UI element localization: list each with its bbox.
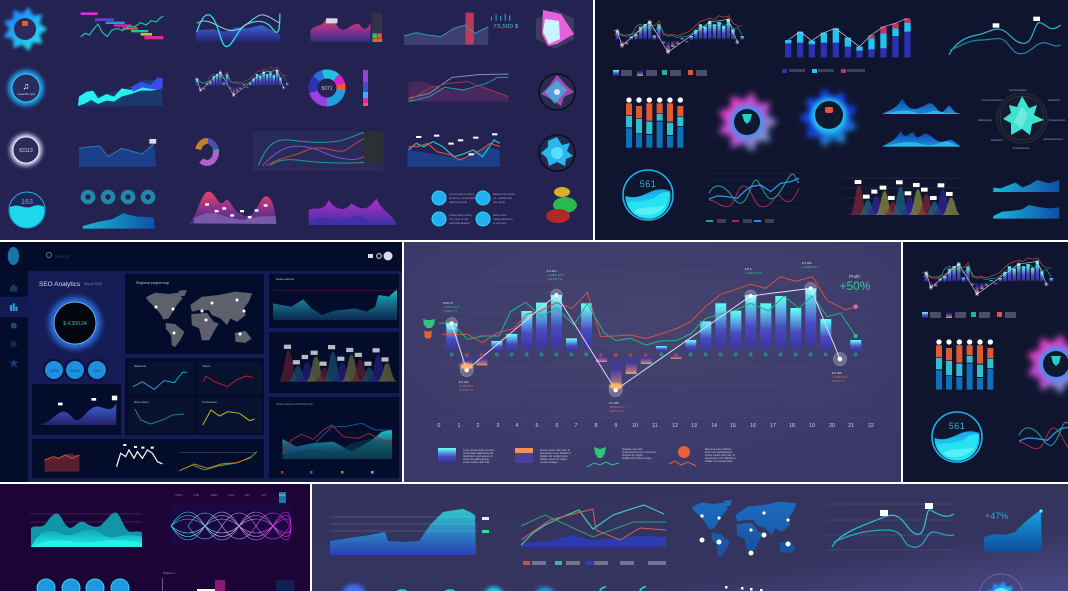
legend: falling bars: Nullam dictum id neque bbox=[540, 457, 568, 461]
text: value callouts: +0.02% 12 h bbox=[443, 305, 460, 309]
text: radar axis labels: Presentation bbox=[1049, 118, 1066, 122]
chart: day tabs: TUE bbox=[193, 493, 199, 497]
chart: day tabs: WED bbox=[210, 493, 218, 497]
text: growth percent: +47% bbox=[985, 511, 1008, 521]
legend: falling bars bbox=[515, 448, 571, 464]
chart axis: 0 to 22: 16 bbox=[750, 423, 756, 429]
text: value callouts: +1.65% 12 h bbox=[547, 273, 564, 277]
text: gauge value 561: 561 bbox=[640, 179, 656, 189]
gauges: three percent rings bbox=[43, 359, 108, 381]
chart: day tabs: FRI bbox=[245, 493, 250, 497]
icon: music player gauge bbox=[8, 70, 44, 106]
text: value callouts: -1.84% 12 h bbox=[832, 375, 848, 379]
chart: stacked bars bbox=[782, 15, 911, 57]
legend: wavy line key bbox=[706, 219, 774, 223]
chart axis: 0 to 22: 8 bbox=[595, 423, 598, 429]
chart: stepped teal area bbox=[330, 509, 489, 555]
chart axis: 0 to 22: 20 bbox=[829, 423, 835, 429]
legend: falling bars: elementum nunc blandit ut. bbox=[540, 451, 571, 455]
text: value callouts: +19.6% 7 d bbox=[547, 277, 562, 281]
chart: day tabs bbox=[176, 492, 286, 503]
icons: cropped glowing row bbox=[342, 584, 762, 591]
chart: purple radar bbox=[539, 74, 575, 110]
text: bubble captions: Maecenas turpis bbox=[493, 192, 516, 196]
map: blue world with pins bbox=[692, 500, 797, 557]
gauge: eclipse total: $ 4,350.24 bbox=[63, 321, 87, 327]
panel: four KPI sparklines bbox=[125, 358, 264, 435]
text: radar axis labels: Professional bbox=[1013, 146, 1030, 150]
icon: bear bbox=[424, 331, 432, 339]
chart axis: 0 to 22: 3 bbox=[497, 423, 500, 429]
panel: dark navy analytics set bbox=[595, 0, 1068, 240]
text: value callouts: -6.27% 7 d bbox=[609, 409, 623, 413]
chart: lower blue area bbox=[993, 205, 1059, 219]
chart: stacked columns with caps bbox=[626, 97, 683, 148]
legend: bear signal: Nullam vel suscipit justo. bbox=[705, 459, 734, 463]
text: bubble captions: in semper bbox=[493, 221, 506, 225]
icon: music player gauge: music06.mp3 bbox=[17, 92, 35, 96]
text: value callouts: +0.82% 12 h bbox=[745, 271, 762, 275]
sidebar: navigation icons bbox=[0, 247, 28, 367]
chart: blue area with table bbox=[79, 139, 157, 167]
chart: donut with percentages: 5071 bbox=[321, 86, 333, 92]
header icons bbox=[368, 252, 392, 260]
text: value callouts: $ 89.70 bbox=[443, 301, 453, 305]
icon: blue bear gauge bbox=[792, 81, 867, 156]
legend: falling bars: Nullam vel suscipit justo. bbox=[540, 454, 569, 458]
icon: pink bull gauge bbox=[718, 92, 778, 152]
chart: area with highlight column: 73,500 $ bbox=[493, 24, 519, 30]
legend: rising bars: amet nisl pellentesque. bbox=[463, 457, 490, 461]
chart: upper blue area bbox=[993, 180, 1059, 192]
panel: four KPI sparklines: New Users bbox=[134, 400, 149, 404]
chart: blue area growth bbox=[984, 509, 1043, 552]
chart axis: 0 to 22: 12 bbox=[672, 423, 678, 429]
gauge: water level 163 bbox=[9, 192, 45, 228]
text: radar axis labels: Analytics bbox=[1048, 98, 1060, 102]
gauge: water level 163: 163 bbox=[21, 199, 33, 206]
legend: bear signal: elementum nunc blandit ut. bbox=[705, 456, 736, 460]
chart: 3D ring segments bbox=[198, 141, 216, 163]
chart: two smooth teal lines bbox=[949, 13, 1061, 55]
panel: trading profit chart bbox=[404, 242, 901, 482]
chart axis: 0 to 22: 2 bbox=[477, 423, 480, 429]
text: value callouts: $ 5.228 bbox=[609, 401, 619, 405]
legend: rising bars: Vestibulum quis augue sit bbox=[463, 454, 493, 458]
chart: two teal curves bbox=[825, 503, 955, 550]
chart: wavy lines bbox=[1019, 420, 1068, 449]
text: gauge value 561: 561 bbox=[949, 421, 965, 431]
text: bubble captions: Fusce diam enim bbox=[449, 213, 472, 217]
chart: day tabs: SUN bbox=[279, 493, 285, 497]
text: radar axis labels: Communication bbox=[982, 98, 1003, 102]
chart axis: 0 to 22: 4 bbox=[516, 423, 519, 429]
chart: area with highlight column bbox=[404, 13, 519, 45]
legend: candlestick key bbox=[523, 561, 666, 565]
text: value callouts: -8.84% 12 h bbox=[609, 405, 625, 409]
chart: main bars and signal lines bbox=[437, 272, 871, 417]
panel: template collection, purple bbox=[0, 0, 593, 240]
panel: blue wave area chart bbox=[32, 384, 121, 435]
chart: wavy lines bbox=[707, 173, 804, 207]
text: report date: Report 2018 bbox=[84, 282, 102, 286]
search bar bbox=[46, 252, 70, 259]
chart: lower blue waves bbox=[882, 131, 961, 147]
chart: cropped progress bars bbox=[162, 571, 294, 591]
gauges: three percent rings: 100% bbox=[50, 369, 58, 373]
chart: donut with percentages bbox=[313, 74, 341, 102]
chart: gantt and candlesticks bbox=[81, 12, 163, 39]
gauges: partially cropped blue rings bbox=[37, 579, 129, 591]
gauge: water level 561 bbox=[623, 170, 673, 220]
text: value callouts: -8.7% 7 d bbox=[832, 379, 845, 383]
chart: interwoven sine ribbon bbox=[170, 503, 291, 545]
panel: bottom row of small charts bbox=[32, 439, 264, 478]
chart: pink radar bbox=[536, 9, 574, 49]
chart axis: 0 to 22: 17 bbox=[770, 423, 776, 429]
icon: music player gauge: ♫ bbox=[23, 81, 29, 91]
text: bubble captions: ex, vestibulum bbox=[493, 196, 513, 200]
gauges: three percent rings: 37% bbox=[93, 369, 101, 373]
panel: SEO analytics dashboard bbox=[0, 242, 402, 482]
text: radar axis labels bbox=[978, 88, 1066, 150]
gauge: eclipse total bbox=[49, 297, 101, 349]
text: value callouts: $ 8.022 bbox=[547, 269, 557, 273]
gauges: three percent rings: 100% bbox=[71, 369, 79, 373]
chart: four progress rings bbox=[83, 192, 153, 202]
text: value callouts: $ 9.560 bbox=[802, 261, 812, 265]
chart axis: 0 to 22: 11 bbox=[652, 423, 658, 429]
search bar: Search bbox=[55, 254, 70, 259]
chart: blue area bbox=[83, 213, 155, 229]
chart axis: 0 to 22: 21 bbox=[848, 423, 854, 429]
text: bubble captions: Sed purus bbox=[493, 213, 507, 217]
panel: four KPI sparklines: Conversion bbox=[202, 400, 218, 404]
text: bubble captions: malesuada dui bbox=[493, 217, 513, 221]
chart axis: 0 to 22 bbox=[438, 423, 874, 429]
chart: day tabs: THU bbox=[228, 493, 234, 497]
icon group: four info bubbles bbox=[432, 191, 490, 226]
icon: orange blob gauge bbox=[4, 7, 48, 51]
icon: bull bbox=[423, 319, 435, 328]
text: bubble captions bbox=[449, 192, 516, 225]
chart: red purple peaks bbox=[188, 192, 276, 224]
chart: candlesticks with volume bbox=[521, 505, 666, 547]
legend: falling bars: Fusce cursus nibh velit, in bbox=[540, 448, 570, 452]
chart axis: 0 to 22: 14 bbox=[711, 423, 717, 429]
panel: magenta dark set bbox=[0, 484, 310, 591]
chart: overlapping bell curves bbox=[843, 178, 961, 215]
chart axis: 0 to 22: 9 bbox=[615, 423, 618, 429]
legend: rising bars: consectetur adipiscing elit. bbox=[463, 451, 494, 455]
legend: rising bars: Lorem ipsum dolor sit amet, bbox=[463, 448, 495, 452]
legend: bear signal: lorem non pellentesque. bbox=[705, 450, 733, 454]
legend: bull signal: Nullam elementum augue. bbox=[622, 456, 653, 460]
panel: regional project map: Regional project map bbox=[136, 281, 169, 285]
panel: data analysis area chart: Data analysis bbox=[276, 277, 295, 281]
legend: bar chart key bbox=[922, 312, 1016, 318]
chart: cyan ribbon bbox=[78, 77, 163, 107]
text: bubble captions: vehicula aliquet bbox=[449, 221, 470, 225]
text: radar axis labels: Administrator bbox=[1009, 88, 1027, 92]
legend: falling bars: cursus tristique. bbox=[540, 460, 558, 464]
chart: stacked sphere slices bbox=[546, 187, 577, 223]
chart: purple mountains bbox=[309, 198, 396, 225]
text: value callouts bbox=[443, 261, 848, 413]
text: radar axis labels: Graphics bbox=[991, 138, 1003, 142]
chart: cyan radar bbox=[539, 135, 575, 171]
legend: bull signal bbox=[587, 447, 657, 467]
chart axis: 0 to 22: 18 bbox=[789, 423, 795, 429]
text: value callouts: -6.17% 7 d bbox=[459, 388, 473, 392]
icon: glowing heart gauge bbox=[979, 574, 1023, 591]
chart axis: 0 to 22: 0 bbox=[438, 423, 441, 429]
legend: rising bars: Fusce cursus nibh velit. bbox=[463, 460, 490, 464]
chart: aqua mountains bbox=[30, 513, 142, 547]
panel: data analysis multi-series area bbox=[269, 397, 399, 478]
chart axis: 0 to 22: 7 bbox=[575, 423, 578, 429]
legend: bull signal: Quisque non velit, bbox=[622, 447, 643, 451]
text: bubble captions: non erat ut dui bbox=[449, 217, 469, 221]
text: value callouts: +1.88% 12 h bbox=[802, 265, 819, 269]
panel: data analysis area chart bbox=[269, 274, 399, 328]
panel: bell chart card bbox=[269, 332, 399, 393]
text: value callouts: $ 6.200 bbox=[459, 380, 469, 384]
chart axis: 0 to 22: 15 bbox=[730, 423, 736, 429]
chart: bars with bull and bear signal lines bbox=[613, 16, 744, 54]
icon: white eclipse gauge bbox=[10, 134, 42, 166]
chart: red to purple waves bbox=[310, 13, 382, 42]
panel: slate dashboard set bbox=[312, 484, 1068, 591]
chart axis: 0 to 22: 22 bbox=[868, 423, 874, 429]
panel: data analysis multi-series area: Data analysis 2018 Monthly bbox=[276, 402, 313, 406]
chart: candlesticks with labels bbox=[407, 133, 500, 167]
chart: upper blue waves bbox=[882, 98, 961, 114]
text: bubble captions: non justo bbox=[493, 200, 506, 204]
legend: bear signal bbox=[669, 446, 736, 466]
chart axis: 0 to 22: 6 bbox=[556, 423, 559, 429]
text: bubble captions: sit amet, consectetur bbox=[449, 196, 477, 200]
chart axis: 0 to 22: 10 bbox=[632, 423, 638, 429]
text: radar axis labels: Marketing bbox=[978, 118, 992, 122]
chart: blue area with curves bbox=[196, 13, 280, 47]
chart: overlapping lines bbox=[409, 74, 508, 102]
chart: day tabs: MON bbox=[176, 493, 182, 497]
chart axis: 0 to 22: 19 bbox=[809, 423, 815, 429]
legend: bull signal: condimentum nunc cursus ac, bbox=[622, 450, 657, 454]
gauge: water level 561 bbox=[932, 412, 982, 462]
text: value callouts: -0.38% 7 d bbox=[443, 309, 457, 313]
chart: day tabs: SAT bbox=[261, 493, 267, 497]
chart: cropped progress bars: Project 1 bbox=[163, 571, 175, 575]
legend: stacked bar key bbox=[782, 69, 865, 73]
text: value callouts: $ 8.5 bbox=[745, 267, 752, 271]
text: bubble captions: adipiscing elit bbox=[449, 200, 467, 204]
chart: bar chart with signal lines bbox=[194, 68, 288, 97]
text: radar axis labels: Advertisement bbox=[1043, 137, 1063, 141]
chart axis: 0 to 22: 5 bbox=[536, 423, 539, 429]
icon: white eclipse gauge: 63113 bbox=[19, 148, 33, 154]
chart: bars with signal lines bbox=[922, 258, 1053, 296]
legend: donut color key bbox=[363, 70, 368, 106]
chart: radar in ring bbox=[997, 93, 1047, 143]
legend: bear signal: Mauris a purus efficitur bbox=[705, 447, 731, 451]
chart: stacked columns bbox=[936, 339, 993, 390]
text: value callouts: -3.1% 12 h bbox=[459, 384, 473, 388]
panel: four KPI sparklines: Views bbox=[202, 364, 210, 368]
legend: bar chart key bbox=[613, 70, 707, 76]
text: value callouts: $ 6.265 bbox=[832, 371, 842, 375]
chart axis: 0 to 22: 13 bbox=[691, 423, 697, 429]
heading: SEO Analytics: SEO Analytics bbox=[39, 281, 81, 288]
chart: rising multi-line bbox=[253, 131, 384, 171]
chart axis: 0 to 22: 1 bbox=[458, 423, 461, 429]
text: bubble captions: Lorem ipsum dolor bbox=[449, 192, 474, 196]
legend: bull signal: tristique et magna. bbox=[622, 453, 644, 457]
panel: four KPI sparklines: Sessions bbox=[134, 364, 147, 368]
panel: regional project map bbox=[125, 274, 264, 354]
text: profit value: +50% bbox=[839, 279, 871, 293]
legend: rising bars bbox=[438, 448, 495, 464]
legend: bear signal: Fusce cursus nibh velit, in bbox=[705, 453, 735, 457]
panel: cropped repeat of navy set bbox=[903, 242, 1068, 482]
text: profit label: Profit: bbox=[849, 274, 861, 279]
icon: pink bull gauge bbox=[1027, 334, 1068, 394]
